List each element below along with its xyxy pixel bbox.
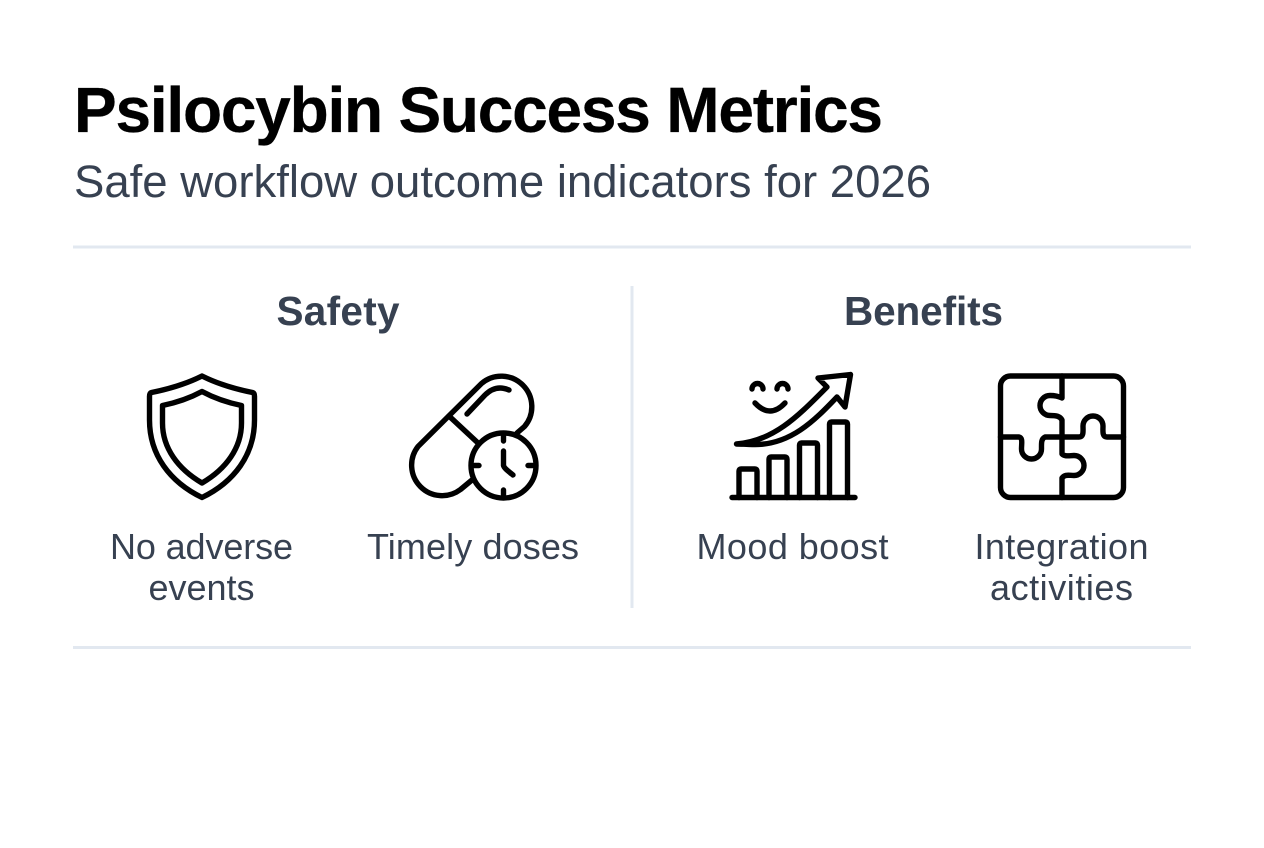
heading: benefits: Benefits [844, 288, 1003, 334]
panel: safety [110, 288, 579, 608]
label: integration activities: Integration [974, 526, 1148, 567]
icon: rising chart with smile [732, 374, 855, 498]
heading: safety: Safety [276, 288, 400, 334]
panel: benefits [696, 288, 1148, 608]
icon: shield [150, 376, 254, 498]
label: no adverse events: events [148, 567, 254, 608]
icon: pill with clock [412, 376, 536, 498]
label: integration activities: activities [990, 567, 1133, 608]
label: timely doses: Timely doses [367, 526, 579, 567]
title: Psilocybin Success Metrics [74, 74, 883, 146]
subtitle: Safe workflow outcome indicators for 2026 [74, 156, 931, 207]
label: no adverse events: No adverse [110, 526, 293, 567]
icon: puzzle [1000, 376, 1124, 498]
label: mood boost: Mood boost [696, 526, 888, 567]
